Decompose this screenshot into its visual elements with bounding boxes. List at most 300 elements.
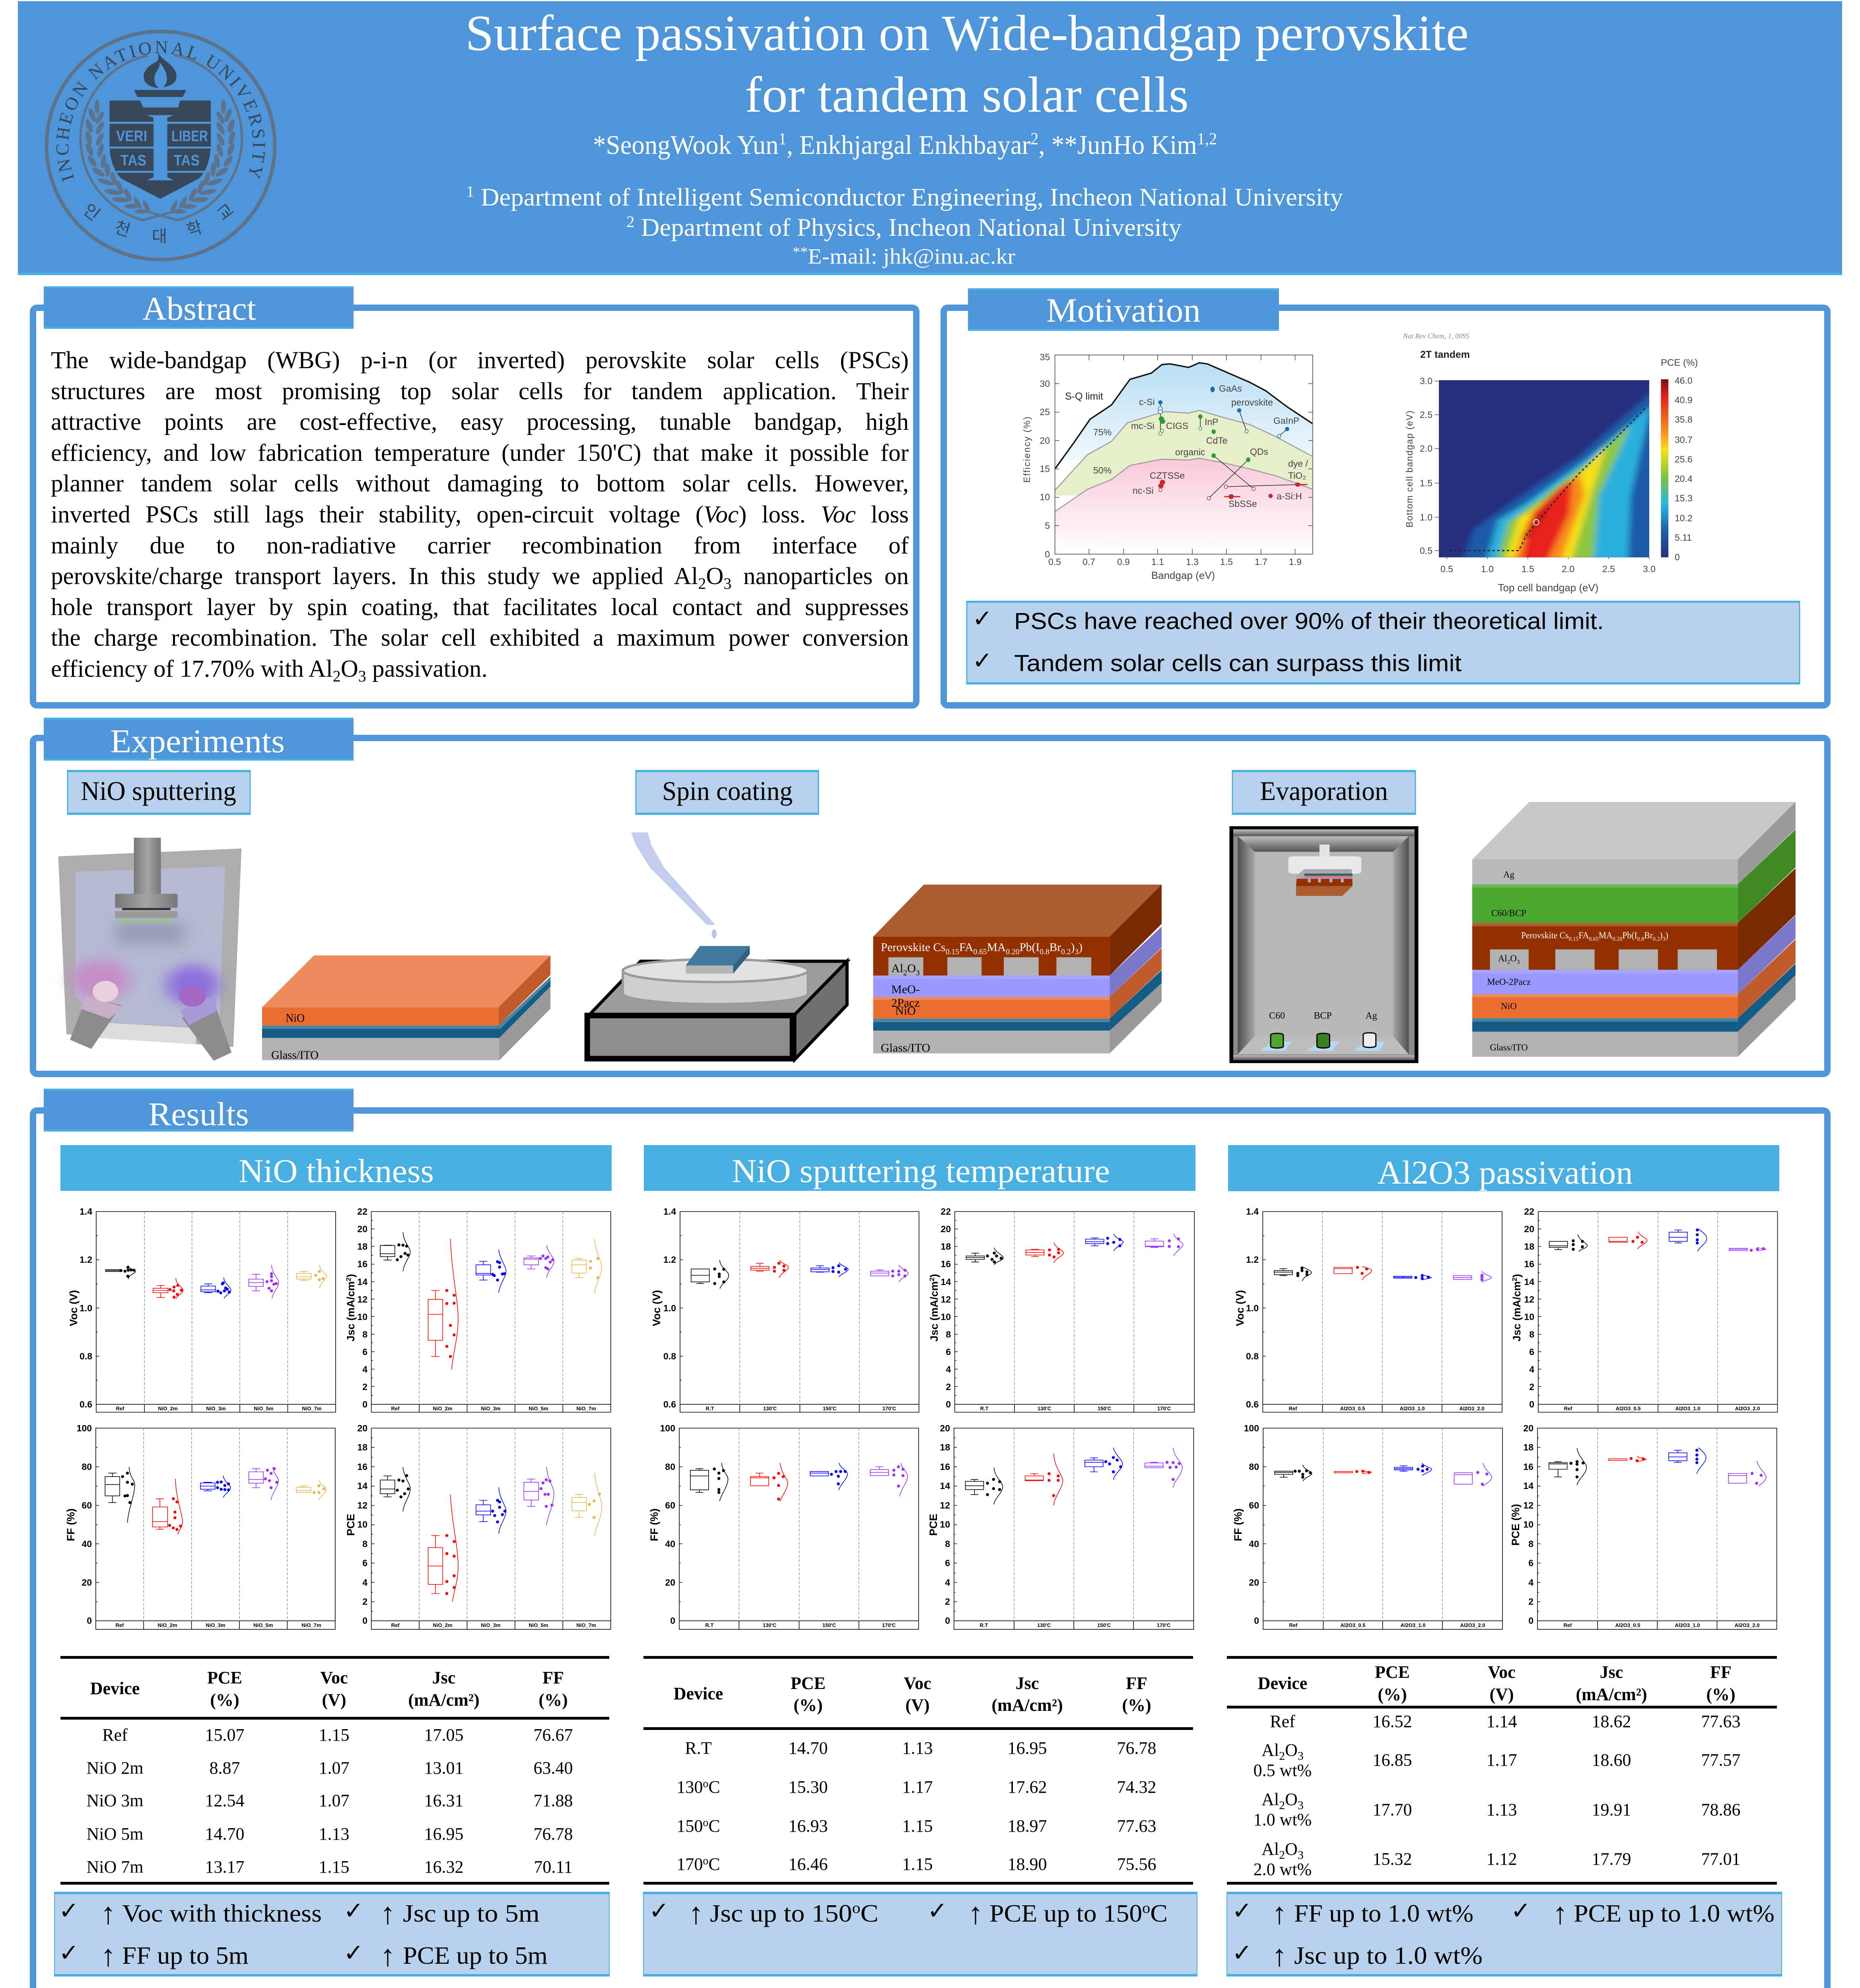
abstract text: inverted PSCs still lags their stability, open-circuit voltage (Voc) loss. Voc loss xyxy=(51,501,909,528)
table: NiO thickness: 16.95 xyxy=(424,1824,464,1844)
chart: efficiency vs bandgap: 1.7 xyxy=(1255,557,1267,567)
authors: 1 xyxy=(779,130,787,148)
table: Al2O3 passivation: (V) xyxy=(1489,1685,1514,1704)
callout: Al2O3 notes: Jsc up to 1.0 wt% xyxy=(1294,1942,1483,1969)
subheading: NiO thickness: NiO thickness xyxy=(239,1153,434,1190)
diagram: full device stack: Br xyxy=(1644,930,1653,940)
chart: 2T tandem heatmap: 1.0 xyxy=(1420,512,1432,522)
chart: NiO thickness Jsc: Ref xyxy=(391,1406,400,1411)
callout: Al2O3 notes: ↑ xyxy=(1553,1897,1568,1930)
heading: results: Results xyxy=(148,1096,249,1133)
chart: 2T tandem heatmap: PCE (%) xyxy=(1661,357,1698,368)
chart: sputtering temperature Jsc: Jsc (mA/cm xyxy=(928,1281,940,1342)
label: NiO sputtering: NiO sputtering xyxy=(81,776,236,806)
table: Al2O3 passivation: 18.60 xyxy=(1592,1750,1631,1770)
abstract text: hole transport layer by spin coating, that facilitates local contact and suppresses xyxy=(51,594,909,621)
table: sputtering temperature: 1.15 xyxy=(902,1816,933,1836)
table: sputtering temperature: Device xyxy=(674,1684,723,1703)
table: NiO thickness: 1.15 xyxy=(319,1857,349,1877)
chart: efficiency vs bandgap: 1.9 xyxy=(1289,557,1302,567)
table: NiO thickness: 1.07 xyxy=(319,1758,349,1778)
chart: NiO thickness FF: 80 xyxy=(82,1462,92,1472)
diagram: full device stack: ) xyxy=(1666,930,1668,940)
label: evaporation: Evaporation xyxy=(1260,776,1388,806)
label: spin coating xyxy=(636,771,818,814)
table: Al2O3 passivation: 77.01 xyxy=(1701,1849,1740,1869)
table: NiO thickness: 13.01 xyxy=(424,1758,464,1778)
logo: Incheon National University seal: INCHEON NATIONAL UNIVERSITY xyxy=(52,37,269,184)
chart: 2T tandem heatmap: 2.0 xyxy=(1420,443,1432,454)
chart: efficiency vs bandgap: Bandgap (eV) xyxy=(1151,569,1215,581)
diagram: Al2O3 on MeO-2Pacz stack: 0.15 xyxy=(946,947,959,956)
table: sputtering temperature: 170 xyxy=(676,1854,703,1874)
chart: NiO thickness Jsc: 18 xyxy=(357,1241,367,1252)
chart: 2T tandem heatmap: 1.5 xyxy=(1420,478,1432,488)
chart: Al2O3 passivation Voc: 1.4 xyxy=(1246,1206,1259,1217)
chart: NiO thickness PCE: 6 xyxy=(362,1558,367,1568)
diagram: full device stack: 0.2 xyxy=(1653,936,1660,942)
chart: Al2O3 passivation Jsc: Ref xyxy=(1564,1406,1572,1411)
diagram: Al2O3 on MeO-2Pacz stack: Perovskite Cs xyxy=(881,941,947,954)
chart: sputtering temperature Jsc: 20 xyxy=(941,1224,951,1234)
callout: motivation takeaways: PSCs have reached over 90% of their theoretical limit. xyxy=(1014,608,1604,634)
table: NiO thickness: 17.05 xyxy=(424,1725,464,1745)
table: sputtering temperature: o xyxy=(703,1778,708,1790)
table: NiO thickness: (V) xyxy=(322,1690,346,1710)
table: Al2O3 passivation: 1.12 xyxy=(1487,1849,1517,1869)
callout: sputtering temperature notes xyxy=(643,1892,1197,1976)
callout: NiO thickness notes: ↑ xyxy=(101,1939,116,1972)
chart: 2T tandem heatmap: 2.5 xyxy=(1420,410,1432,420)
chart: efficiency vs bandgap: dye / xyxy=(1288,458,1308,469)
table: Al2O3 passivation: 1.13 xyxy=(1487,1800,1517,1819)
callout: sputtering temperature notes: C xyxy=(861,1900,878,1927)
icon: evaporation chamber: BCP xyxy=(1314,1011,1332,1021)
table: Al2O3 passivation xyxy=(1227,1656,1777,1885)
chart: Al2O3 passivation Voc xyxy=(1234,1206,1502,1412)
chart: 2T tandem heatmap: 15.3 xyxy=(1675,493,1693,503)
table: sputtering temperature: (%) xyxy=(1122,1695,1151,1715)
diagram: full device stack: NiO xyxy=(1501,1001,1517,1011)
chart: efficiency vs bandgap: CdTe xyxy=(1206,435,1228,446)
chart: NiO thickness Jsc: Jsc (mA/cm xyxy=(345,1281,357,1342)
chart: NiO thickness Jsc: 16 xyxy=(357,1259,367,1269)
table: sputtering temperature: 130 xyxy=(676,1777,703,1797)
chart: Al2O3 passivation Jsc: 2 xyxy=(1511,1277,1518,1281)
table: Al2O3 passivation: 16.52 xyxy=(1373,1712,1412,1731)
table: sputtering temperature: 77.63 xyxy=(1117,1816,1156,1836)
chart: NiO thickness FF: NiO_3m xyxy=(206,1622,225,1628)
chart: efficiency vs bandgap xyxy=(1022,352,1313,581)
callout: NiO thickness notes: ✓ xyxy=(344,1939,363,1967)
diagram: Al2O3 on MeO-2Pacz stack: MA xyxy=(987,941,1006,954)
table: NiO thickness: (%) xyxy=(210,1690,239,1710)
logo: Incheon National University seal: TAS xyxy=(174,152,200,169)
table: sputtering temperature: 150 xyxy=(676,1816,703,1836)
diagram: NiO on glass/ITO stack xyxy=(262,955,550,1062)
chart: sputtering temperature Jsc: 170'C xyxy=(1157,1406,1171,1411)
diagram: full device stack: 3 xyxy=(1663,936,1666,942)
callout: Al2O3 notes: ↑ xyxy=(1272,1939,1287,1972)
chart: sputtering temperature FF: R.T xyxy=(706,1622,714,1628)
heading: experiments: Experiments xyxy=(110,723,285,760)
chart: NiO thickness PCE xyxy=(345,1423,611,1629)
chart: NiO thickness Jsc: 10 xyxy=(357,1312,367,1322)
diagram: full device stack: 0.20 xyxy=(1613,936,1622,942)
diagram: full device stack: 0.65 xyxy=(1589,936,1599,942)
diagram: Al2O3 on MeO-2Pacz stack: 3 xyxy=(1075,947,1079,956)
chart: Al2O3 passivation PCE: PCE (%) xyxy=(1510,1504,1522,1546)
authors: , **JunHo Kim xyxy=(1038,130,1197,160)
chart: 2T tandem heatmap: 0.5 xyxy=(1420,546,1432,556)
chart: efficiency vs bandgap: 35 xyxy=(1040,352,1050,362)
table: NiO thickness: 71.88 xyxy=(534,1791,573,1810)
diagram: full device stack: MA xyxy=(1599,930,1613,940)
diagram: Al2O3 on MeO-2Pacz stack: FA xyxy=(959,941,974,954)
chart: efficiency vs bandgap: 20 xyxy=(1040,435,1050,446)
table: Al2O3 passivation: 1.0 wt% xyxy=(1254,1810,1312,1829)
chart: sputtering temperature PCE: 8 xyxy=(945,1539,950,1549)
table: Al2O3 passivation: 3 xyxy=(1298,1799,1304,1812)
diagram: Al2O3 on MeO-2Pacz stack: 2Pacz xyxy=(891,996,920,1010)
chart: sputtering temperature Jsc: 12 xyxy=(941,1294,951,1305)
diagram: full device stack: 2 xyxy=(1507,959,1510,965)
callout: sputtering temperature notes: Jsc up to 150 xyxy=(710,1900,839,1927)
table: NiO thickness: 1.13 xyxy=(319,1824,349,1844)
authors: 1,2 xyxy=(1197,130,1217,148)
abstract text: perovskite/charge transport layers. In this study we applied Al2O3 nanoparticles on xyxy=(51,563,909,592)
callout: Al2O3 notes xyxy=(1227,1892,1782,1976)
chart: 2T tandem heatmap: 1.5 xyxy=(1522,564,1534,574)
chart: 2T tandem heatmap xyxy=(1403,332,1698,594)
chart: NiO thickness PCE: NiO_3m xyxy=(481,1622,501,1628)
table: Al2O3 passivation: 2 xyxy=(1279,1749,1285,1763)
diagram: full device stack: Perovskite Cs xyxy=(1521,930,1572,940)
chart: Al2O3 passivation FF: 100 xyxy=(1244,1423,1259,1433)
chart: NiO thickness PCE: 18 xyxy=(357,1442,367,1452)
chart: 2T tandem heatmap: 2.0 xyxy=(1562,564,1574,574)
header banner xyxy=(18,1,1842,275)
callout: NiO thickness notes: ✓ xyxy=(59,1939,79,1967)
chart: 2T tandem heatmap: 35.8 xyxy=(1675,414,1693,425)
chart: efficiency vs bandgap: GaInP xyxy=(1273,415,1299,426)
chart: 2T tandem heatmap: 10.2 xyxy=(1675,513,1693,523)
table: Al2O3 passivation: 77.57 xyxy=(1701,1750,1740,1770)
chart: sputtering temperature PCE: 16 xyxy=(940,1462,950,1472)
chart: NiO thickness FF: NiO_7m xyxy=(301,1622,321,1628)
table: Al2O3 passivation: 17.79 xyxy=(1592,1849,1631,1869)
chart: NiO thickness PCE: 10 xyxy=(357,1519,367,1530)
subheading: NiO sputtering temperature: NiO sputtering temperature xyxy=(732,1153,1110,1190)
callout: Al2O3 notes: FF up to 1.0 wt% xyxy=(1294,1900,1473,1927)
callout: sputtering temperature notes: o xyxy=(1142,1900,1150,1916)
diagram: Al2O3 on MeO-2Pacz stack: ) xyxy=(1071,941,1075,954)
chart: NiO thickness PCE: NiO_7m xyxy=(576,1622,596,1628)
icon: evaporation chamber xyxy=(1229,826,1418,1063)
chart: NiO thickness Voc: 1.0 xyxy=(80,1303,92,1313)
table: NiO thickness: (mA/cm²) xyxy=(408,1690,480,1710)
chart: 2T tandem heatmap: Bottom cell bandgap (eV) xyxy=(1404,410,1415,528)
chart: sputtering temperature PCE: 0 xyxy=(945,1615,950,1626)
chart: 2T tandem heatmap: 0 xyxy=(1675,552,1680,562)
table: Al2O3 passivation: 1.17 xyxy=(1487,1750,1517,1770)
subheading: NiO thickness xyxy=(60,1145,612,1191)
icon: evaporation chamber: Ag xyxy=(1365,1011,1377,1021)
callout: motivation takeaways xyxy=(967,601,1800,684)
diagram: full device stack: MeO-2Pacz xyxy=(1487,977,1531,987)
chart: 2T tandem heatmap: 1.0 xyxy=(1481,564,1494,574)
chart: efficiency vs bandgap: SbSSe xyxy=(1228,499,1257,509)
chart: sputtering temperature PCE: R.T xyxy=(980,1622,988,1628)
chart: NiO thickness Voc: 0.6 xyxy=(80,1399,92,1409)
chart: Al2O3 passivation Jsc: 18 xyxy=(1524,1241,1534,1252)
chart: sputtering temperature FF: 80 xyxy=(665,1462,675,1472)
chart: Al2O3 passivation Jsc: 4 xyxy=(1529,1364,1534,1375)
table: sputtering temperature: (%) xyxy=(793,1695,823,1715)
chart: efficiency vs bandgap: 0 xyxy=(1045,549,1050,559)
chart: Al2O3 passivation PCE: Al2O3_0.5 xyxy=(1615,1622,1640,1628)
table: Al2O3 passivation: 2.0 wt% xyxy=(1254,1860,1312,1879)
chart: efficiency vs bandgap: 30 xyxy=(1040,379,1050,389)
chart: efficiency vs bandgap: c-Si xyxy=(1139,397,1155,407)
chart: NiO thickness Jsc: ) xyxy=(345,1274,357,1277)
chart: Al2O3 passivation FF: 20 xyxy=(1249,1577,1259,1588)
chart: NiO thickness Jsc: NiO_7m xyxy=(576,1406,596,1411)
callout: NiO thickness notes: Jsc up to 5m xyxy=(403,1900,540,1927)
chart: efficiency vs bandgap: nc-Si xyxy=(1133,485,1153,496)
chart: NiO thickness PCE: Ref xyxy=(391,1622,400,1628)
chart: efficiency vs bandgap: CZTSSe xyxy=(1150,470,1185,481)
chart: efficiency vs bandgap: 75% xyxy=(1093,427,1112,437)
table: Al2O3 passivation: 16.85 xyxy=(1373,1750,1412,1770)
table: NiO thickness: 76.78 xyxy=(534,1824,573,1844)
table: Al2O3 passivation: (mA/cm²) xyxy=(1576,1685,1647,1704)
table: sputtering temperature: 16.46 xyxy=(788,1854,828,1874)
chart: 2T tandem heatmap: 20.4 xyxy=(1675,474,1693,484)
table: sputtering temperature: C xyxy=(708,1816,720,1836)
chart: sputtering temperature Voc: 0.6 xyxy=(663,1399,676,1409)
chart: sputtering temperature Jsc: 22 xyxy=(941,1206,951,1217)
chart: Al2O3 passivation PCE: Ref xyxy=(1564,1622,1572,1628)
panel: motivation xyxy=(944,288,1827,705)
chart: Al2O3 passivation PCE: 6 xyxy=(1528,1558,1533,1568)
table: sputtering temperature: 75.56 xyxy=(1117,1854,1156,1874)
diagram: full device stack: Pb(I xyxy=(1622,930,1637,940)
chart: NiO thickness FF: 20 xyxy=(82,1577,92,1588)
chart: efficiency vs bandgap: 5 xyxy=(1045,520,1050,531)
chart: sputtering temperature Jsc: 14 xyxy=(941,1277,951,1287)
chart: sputtering temperature PCE: 130'C xyxy=(1037,1622,1051,1628)
table: sputtering temperature: 1.15 xyxy=(902,1854,933,1874)
diagram: full device stack: 0.15 xyxy=(1569,936,1578,942)
abstract text: planner tandem solar cells without damaging to bottom solar cells. However, xyxy=(51,470,909,497)
chart: sputtering temperature FF xyxy=(648,1423,919,1629)
chart: sputtering temperature FF: FF (%) xyxy=(648,1508,660,1541)
chart: sputtering temperature FF: 170'C xyxy=(882,1622,896,1628)
chart: sputtering temperature Voc: R.T xyxy=(706,1406,714,1411)
diagram: full device stack xyxy=(1472,802,1796,1057)
affiliation 2: Department of Physics, Incheon National University xyxy=(635,214,1182,241)
chart: sputtering temperature Jsc: R.T xyxy=(980,1406,989,1411)
chart: sputtering temperature Voc: 0.8 xyxy=(663,1351,676,1361)
diagram: Al2O3 on MeO-2Pacz stack: MeO- xyxy=(891,983,920,996)
chart: NiO thickness Voc xyxy=(68,1206,336,1412)
chart: sputtering temperature PCE: 6 xyxy=(945,1558,950,1568)
diagram: full device stack: Glass/ITO xyxy=(1490,1043,1528,1052)
chart: sputtering temperature Voc: 1.2 xyxy=(663,1254,676,1265)
callout: Al2O3 notes: ✓ xyxy=(1232,1939,1252,1967)
callout: NiO thickness notes: Voc with thickness xyxy=(122,1900,322,1927)
chart: 2T tandem heatmap: 3.0 xyxy=(1643,564,1656,574)
chart: 2T tandem heatmap: 2T tandem xyxy=(1420,349,1470,360)
chart: efficiency vs bandgap: 0.5 xyxy=(1048,557,1061,567)
logo: Incheon National University seal: VERI xyxy=(116,128,147,145)
logo: Incheon National University seal: 천 xyxy=(113,217,132,240)
logo: Incheon National University seal: TAS xyxy=(121,152,146,169)
subheading: NiO sputtering temperature xyxy=(644,1145,1195,1191)
chart: efficiency vs bandgap: organic xyxy=(1175,447,1205,457)
logo: Incheon National University seal: 인 xyxy=(80,200,103,224)
chart: Al2O3 passivation Voc: Al2O3_2.0 xyxy=(1460,1406,1484,1411)
chart: 2T tandem heatmap: 46.0 xyxy=(1675,375,1693,386)
chart: efficiency vs bandgap: 1.1 xyxy=(1151,557,1164,567)
callout: NiO thickness notes xyxy=(54,1892,609,1976)
callout: sputtering temperature notes: ↑ xyxy=(968,1897,983,1930)
chart: sputtering temperature Jsc: 16 xyxy=(941,1259,951,1269)
chart: efficiency vs bandgap: 1.5 xyxy=(1220,557,1233,567)
table: NiO thickness: 12.54 xyxy=(205,1791,244,1810)
label: NiO sputtering xyxy=(68,771,250,814)
chart: efficiency vs bandgap: Efficiency (%) xyxy=(1022,416,1032,483)
chart: NiO thickness Jsc: 4 xyxy=(362,1364,367,1375)
table: Al2O3 passivation: 77.63 xyxy=(1701,1712,1740,1731)
chart: 2T tandem heatmap: 0.5 xyxy=(1440,564,1453,574)
diagram: NiO on glass/ITO stack: Glass/ITO xyxy=(271,1048,319,1062)
chart: sputtering temperature Jsc: 4 xyxy=(946,1364,951,1375)
table: sputtering temperature: 18.97 xyxy=(1008,1816,1047,1836)
callout: NiO thickness notes: ↑ xyxy=(380,1939,395,1972)
chart: sputtering temperature FF: 100 xyxy=(660,1423,675,1433)
callout: NiO thickness notes: ✓ xyxy=(59,1897,79,1925)
table: sputtering temperature: 15.30 xyxy=(788,1777,828,1797)
table: NiO thickness: 16.32 xyxy=(424,1857,464,1877)
chart: 2T tandem heatmap: 25.6 xyxy=(1675,454,1693,464)
table: NiO thickness xyxy=(60,1656,609,1885)
chart: Al2O3 passivation FF: 60 xyxy=(1249,1500,1259,1510)
chart: Al2O3 passivation Voc: 1.0 xyxy=(1246,1303,1259,1313)
chart: Al2O3 passivation Jsc: Al2O3_1.0 xyxy=(1675,1406,1700,1411)
table: Al2O3 passivation: 2 xyxy=(1279,1799,1285,1812)
chart: sputtering temperature Jsc: 2 xyxy=(928,1277,936,1281)
chart: NiO thickness Jsc: 8 xyxy=(362,1329,367,1340)
table: Al2O3 passivation: O xyxy=(1285,1790,1298,1809)
chart: sputtering temperature Jsc: 6 xyxy=(946,1347,951,1357)
panel: results xyxy=(33,1089,1827,1988)
logo: Incheon National University seal xyxy=(47,31,275,260)
diagram: Al2O3 on MeO-2Pacz stack: NiO xyxy=(895,1004,916,1017)
table: Al2O3 passivation: 17.70 xyxy=(1373,1800,1412,1819)
chart: NiO thickness PCE: 2 xyxy=(362,1596,367,1607)
chart: Al2O3 passivation Jsc: 8 xyxy=(1529,1329,1534,1340)
chart: sputtering temperature PCE xyxy=(927,1423,1193,1629)
callout: Al2O3 notes: ✓ xyxy=(1232,1897,1252,1925)
chart: NiO thickness Voc: 1.2 xyxy=(80,1254,92,1265)
chart: sputtering temperature Voc xyxy=(651,1206,919,1412)
chart: sputtering temperature Jsc: 10 xyxy=(941,1312,951,1322)
table: sputtering temperature: C xyxy=(708,1777,720,1797)
chart: sputtering temperature Voc: 170'C xyxy=(882,1406,896,1411)
chart: NiO thickness PCE: 14 xyxy=(357,1481,367,1491)
table: sputtering temperature: PCE xyxy=(791,1673,826,1693)
table: NiO thickness: 15.07 xyxy=(205,1725,244,1745)
chart: efficiency vs bandgap: 50% xyxy=(1093,465,1112,476)
table: sputtering temperature: 17.62 xyxy=(1008,1777,1047,1797)
chart: sputtering temperature PCE: 150'C xyxy=(1097,1622,1111,1628)
diagram: full device stack: ) xyxy=(1660,930,1663,940)
chart: 2T tandem heatmap: Top cell bandgap (eV) xyxy=(1498,582,1598,594)
chart: sputtering temperature PCE: 18 xyxy=(940,1442,950,1452)
chart: 2T tandem heatmap: 3.0 xyxy=(1420,376,1432,386)
chart: NiO thickness PCE: 8 xyxy=(362,1539,367,1549)
chart: efficiency vs bandgap: 15 xyxy=(1040,464,1050,474)
table: Al2O3 passivation: O xyxy=(1285,1839,1298,1859)
subheading: Al2O3 passivation: Al2O3 passivation xyxy=(1377,1154,1633,1191)
table: sputtering temperature: 1.17 xyxy=(902,1777,933,1797)
table: NiO thickness: NiO 3m xyxy=(87,1791,143,1810)
label: spin coating: Spin coating xyxy=(662,776,793,806)
chart: NiO thickness PCE: NiO_2m xyxy=(433,1622,453,1628)
table: sputtering temperature: Jsc xyxy=(1016,1673,1039,1693)
chart: NiO thickness PCE: NiO_5m xyxy=(529,1622,548,1628)
chart: Al2O3 passivation PCE: 20 xyxy=(1523,1423,1533,1433)
table: sputtering temperature: C xyxy=(708,1854,720,1874)
table: sputtering temperature: 76.78 xyxy=(1117,1738,1156,1758)
chart: 2T tandem heatmap: 5.11 xyxy=(1675,532,1692,543)
chart: NiO thickness Voc: NiO_3m xyxy=(206,1406,226,1411)
chart: Al2O3 passivation Jsc: 0 xyxy=(1529,1399,1534,1409)
logo: Incheon National University seal: 교 xyxy=(214,200,237,224)
diagram: Al2O3 on MeO-2Pacz stack: 0.65 xyxy=(973,947,987,956)
diagram: Al2O3 on MeO-2Pacz stack: 3 xyxy=(916,969,920,977)
diagram: Al2O3 on MeO-2Pacz stack: Pb(I xyxy=(1019,941,1040,954)
chart: NiO thickness FF: 40 xyxy=(82,1539,92,1549)
callout: motivation takeaways: ✓ xyxy=(972,605,992,633)
callout: motivation takeaways: ✓ xyxy=(972,647,992,675)
chart: NiO thickness Jsc xyxy=(345,1206,611,1412)
callout: Al2O3 notes: PCE up to 1.0 wt% xyxy=(1574,1900,1774,1927)
diagram: Al2O3 on MeO-2Pacz stack: O xyxy=(907,962,916,975)
chart: sputtering temperature FF: 40 xyxy=(665,1539,675,1549)
chart: Al2O3 passivation PCE: 12 xyxy=(1523,1500,1533,1510)
abstract text: mainly due to non-radiative carrier recombination from interface of xyxy=(51,532,909,559)
abstract text: efficiency, and low fabrication temperature (under 150'C) that make it possible for xyxy=(51,440,909,466)
callout: sputtering temperature notes: ✓ xyxy=(649,1897,669,1925)
authors: , Enkhjargal Enkhbayar xyxy=(787,130,1031,160)
table: Al2O3 passivation: 2 xyxy=(1279,1848,1285,1862)
heading: abstract xyxy=(44,286,354,329)
title xyxy=(465,5,1469,123)
table: NiO thickness: NiO 2m xyxy=(87,1758,143,1778)
affiliation 2: 2 xyxy=(626,213,635,231)
panel: experiments xyxy=(33,718,1827,1074)
chart: NiO thickness Jsc: 2 xyxy=(362,1382,367,1392)
table: Al2O3 passivation: (%) xyxy=(1378,1685,1407,1704)
affiliation 1: 1 xyxy=(466,182,474,200)
chart: sputtering temperature PCE: 2 xyxy=(945,1596,950,1607)
table: sputtering temperature: 16.93 xyxy=(788,1816,828,1836)
chart: Al2O3 passivation Jsc xyxy=(1511,1206,1778,1412)
chart: Al2O3 passivation FF: 80 xyxy=(1249,1462,1259,1472)
